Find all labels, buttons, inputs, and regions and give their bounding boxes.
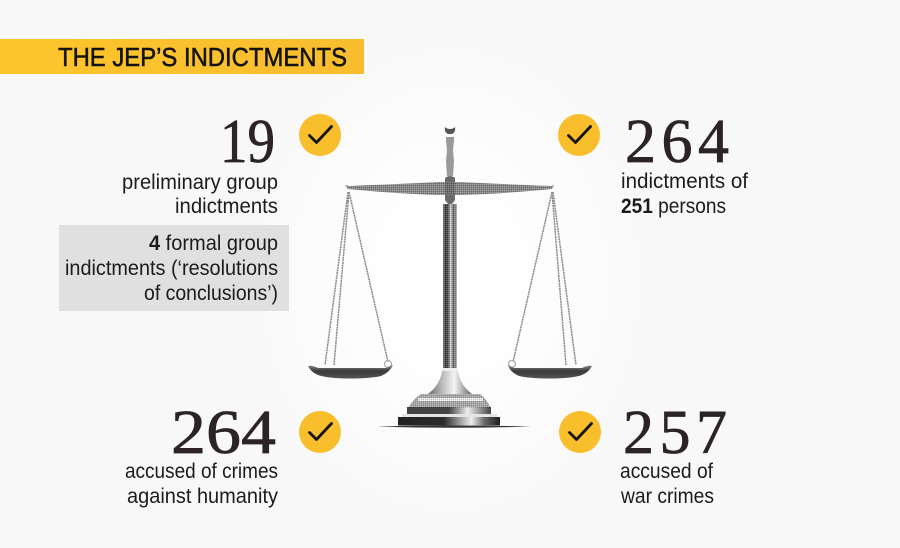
callout: formal group indictments: 4 formal group [149,232,278,255]
beam [345,182,554,195]
stat: 264 accused of crimes against humanity [125,399,278,508]
title banner [0,39,364,74]
stat: 264 accused of crimes against humanity: 264 [171,399,276,467]
callout: formal group indictments: indictments (‘resolutions [65,257,278,280]
icon: check bottom left [299,411,341,453]
dome [408,394,491,408]
halftone overlay [345,182,554,408]
stat: 19 preliminary group indictments: indictments [175,195,278,218]
stat: 19 preliminary group indictments: preliminary group [122,171,278,194]
step shine [402,414,497,417]
stat: 264 indictments of 251 persons: 264 [625,108,729,176]
stat: 264 indictments of 251 persons [621,108,748,218]
base shadow [377,426,531,428]
stat: 264 indictments of 251 persons: 251 persons [621,195,726,218]
title: THE JEP’S INDICTMENTS [58,42,347,72]
left pan strings [325,192,388,365]
finial [445,127,455,176]
column [443,204,457,368]
stat: 257 accused of war crimes: 257 [623,399,727,467]
stat: 19 preliminary group indictments: 19 [220,108,275,176]
lighter paper behind the scales [230,10,670,548]
stat: 257 accused of war crimes: war crimes [620,485,714,508]
icon: check top right [558,114,600,156]
stat: 257 accused of war crimes: accused of [620,460,713,483]
left pan [308,360,393,378]
base flare [428,371,472,394]
stat: 19 preliminary group indictments [122,108,278,218]
stat: 264 accused of crimes against humanity: accused of crimes [125,460,278,483]
callout: formal group indictments: of conclusions’) [144,282,278,305]
dome highlights [418,398,483,401]
step [407,407,491,414]
stat: 264 indictments of 251 persons: indictments of [621,170,748,193]
icon: check bottom right [559,411,601,453]
right pan [508,360,592,378]
illustration: scales of justice [308,127,592,428]
stat: 264 accused of crimes against humanity: against humanity [127,485,278,508]
collar [442,368,458,371]
hub [445,176,455,204]
right pan strings [513,192,576,365]
callout: formal group indictments [59,225,289,311]
plate [398,417,500,426]
stat: 257 accused of war crimes [620,399,727,508]
icon: check top left [299,114,341,156]
